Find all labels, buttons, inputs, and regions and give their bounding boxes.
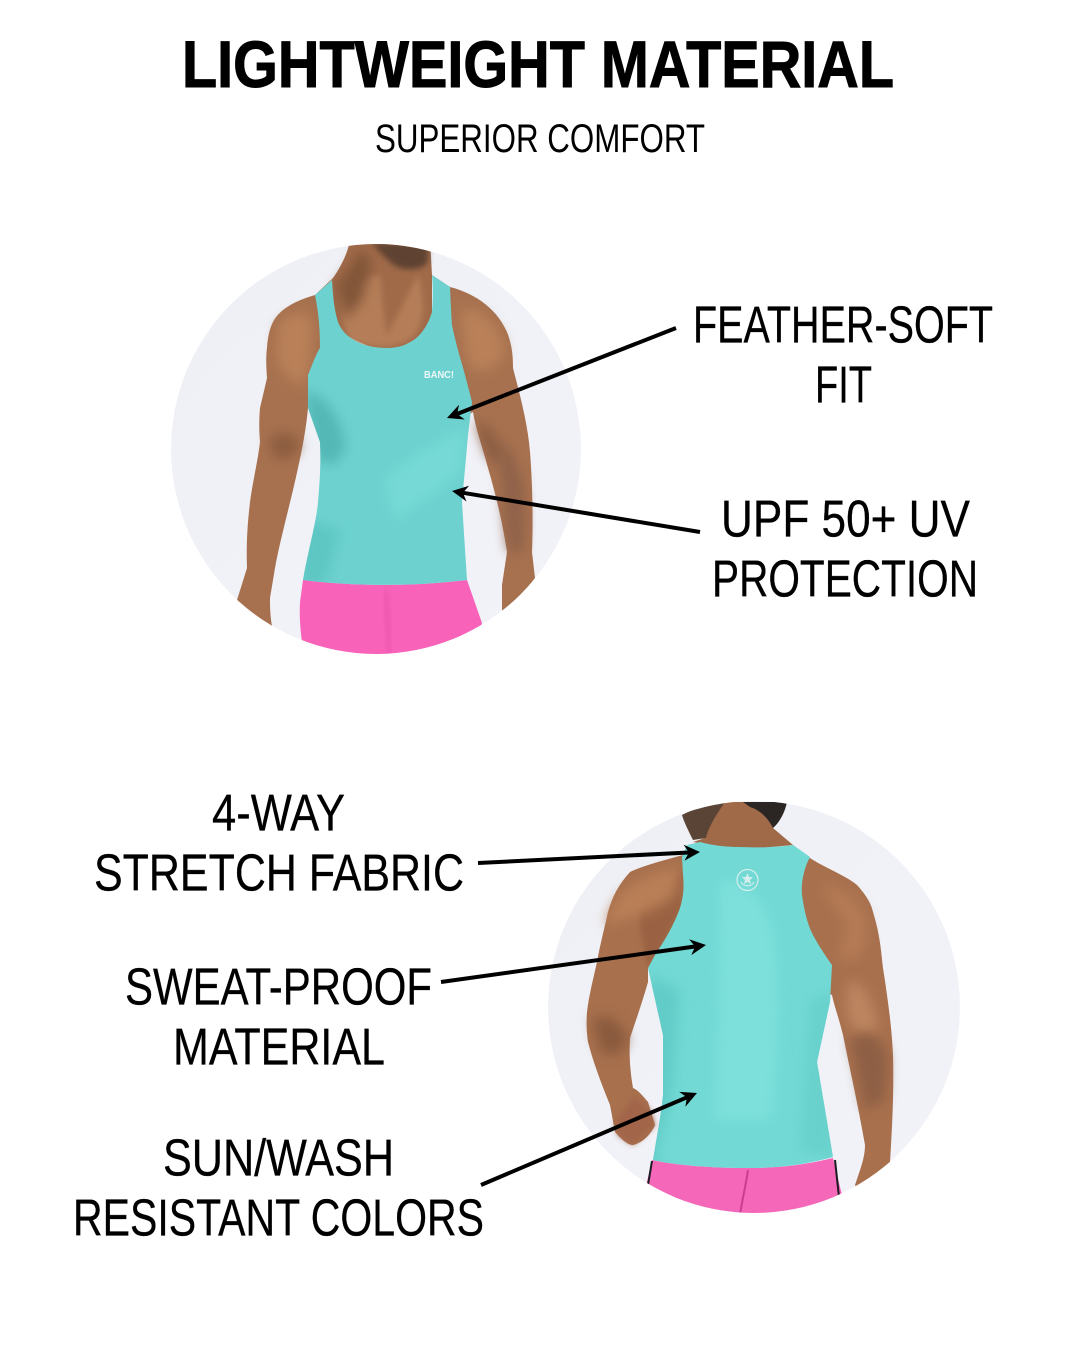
hand [615,1096,655,1145]
label: sweat-proof material [125,958,432,1076]
shorts crease [388,653,392,654]
shorts seams [648,1160,839,1215]
hair [743,802,787,828]
tank logo: BANC! [424,370,454,381]
circle background [548,801,960,1213]
pink shorts [300,580,482,660]
tank top back [640,842,835,1180]
arrow: feather-soft fit [447,328,676,420]
beard [682,802,725,840]
arrow: sweat-proof material [441,939,706,982]
circle background [171,244,581,654]
arrow: upf protection [452,486,700,532]
label: feather-soft fit: FIT [815,356,872,414]
tank top front [300,275,472,585]
label: sun/wash resistant colors: SUN/WASH [163,1130,394,1188]
label: upf protection: PROTECTION [712,550,978,608]
label: feather-soft fit: FEATHER-SOFT [693,296,993,354]
panel: front view photo circle [171,240,581,660]
label: 4-way stretch fabric [94,784,464,902]
label: upf protection: UPF 50+ UV [721,490,970,548]
label: sun/wash resistant colors: RESISTANT COLORS [73,1190,484,1248]
label: 4-way stretch fabric: 4-WAY [212,784,345,842]
model back: skin [587,802,893,1190]
title: LIGHTWEIGHT MATERIAL [182,27,894,101]
label: sweat-proof material: MATERIAL [173,1018,385,1076]
label: 4-way stretch fabric: STRETCH FABRIC [94,844,464,902]
pink shorts [646,1158,842,1213]
arrow: 4-way stretch fabric [478,845,700,863]
label: sweat-proof material: SWEAT-PROOF [125,958,432,1016]
back logo [737,870,758,890]
label: sun/wash resistant colors [73,1130,484,1248]
label: upf protection [712,490,978,608]
panel: back view photo circle [548,801,960,1225]
neck [693,802,793,850]
subtitle: SUPERIOR COMFORT [375,117,705,161]
arrow: sun/wash resistant colors [481,1092,697,1185]
model front: skin [237,240,535,626]
label: feather-soft fit [693,296,993,414]
